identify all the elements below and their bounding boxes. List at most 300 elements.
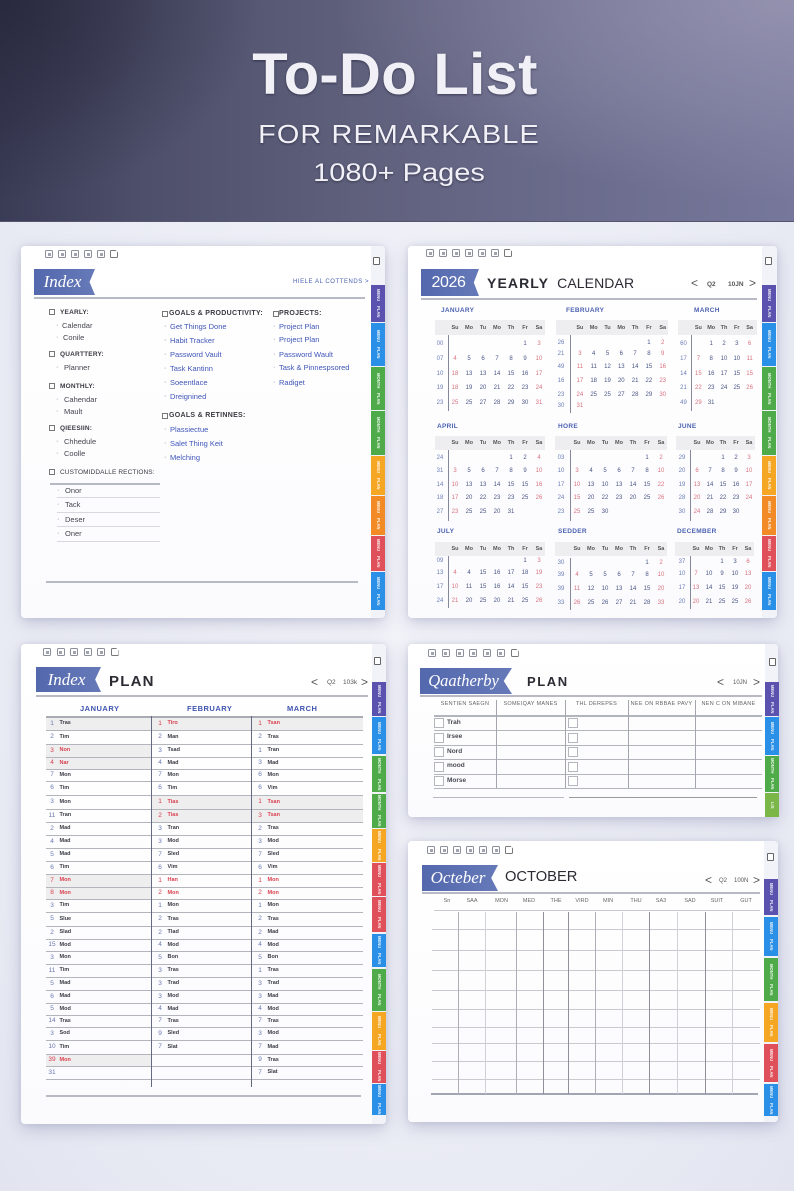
tab column background [765,644,778,817]
side tabs: PLAN [377,1070,382,1081]
index column: periods: Onor [65,486,82,495]
month: January: 6 [481,356,485,362]
month: January: 18 [452,371,458,377]
month: May: 4 [589,468,593,474]
month: December: 17 [679,585,685,591]
month: February: 30 [659,392,666,398]
side tabs: PLAN [377,917,382,929]
month: February: FEBRUARY [566,307,604,314]
month: June: 9 [734,468,738,474]
planner table: 11 [49,812,55,819]
month: May: 24 [558,495,564,501]
planner table: 31 [48,1069,56,1076]
planner table: 4 [158,941,162,948]
index column: goals: Plassiectue [170,425,208,434]
planner table: Mon [60,890,71,896]
month: September: 6 [617,572,621,578]
month: March: 15 [695,371,702,377]
side tabs: PLAN [769,900,774,911]
banner: October: Octeber [431,868,485,887]
planner table: Tras [268,734,279,740]
navigation: Q2 [327,679,336,686]
planner table: 2 [158,812,162,819]
side tabs: MENU [376,289,381,301]
toolbar icons [43,648,118,656]
month: April: 22 [480,495,486,501]
month: February: 25 [590,392,597,398]
planner table: 2 [50,929,54,936]
icon: page [769,658,776,666]
month: June: 24 [746,495,752,501]
month: January: 19 [437,385,443,391]
month: February: 28 [632,392,638,398]
planner table: 3 [158,980,162,987]
month: September: 20 [658,586,664,592]
month: February: 13 [618,364,625,370]
month: December: 3 [733,559,737,565]
index column: goals: · [164,426,166,433]
month: September: Su [573,546,581,552]
banner: Quarterly [420,668,512,694]
month: May: 6 [617,468,621,474]
month: February [556,307,668,413]
month: May: Mo [615,440,623,446]
planner table: Mon [268,890,279,896]
month: July: Su [451,546,459,552]
month: February: 17 [577,378,583,384]
month: February: Mo [590,325,598,331]
planner table: 3 [50,1030,54,1037]
planner table: Mon [168,772,179,778]
month headings: JANUARY [80,704,119,713]
month: February: Mo [617,325,625,331]
navigation: < [705,873,712,887]
side tabs: MENU [376,577,381,589]
side tabs: PLAN [769,1066,774,1077]
planner table: Tran [168,825,179,831]
month: March: 15 [746,371,753,377]
index column: goals: · [164,454,166,461]
index column: periods: · [56,364,58,371]
month: May: 17 [558,482,564,488]
month: January: Fr [522,325,528,331]
month: June: Mo [706,440,714,446]
side tabs: PLAN [377,739,382,750]
index column: periods: · [56,438,58,445]
planner table: 6 [50,864,54,871]
month: April: 25 [522,495,528,501]
index column: periods: Deser [65,515,85,524]
planner table: 5 [50,980,54,987]
month: January: 20 [480,385,486,391]
month: December: 9 [720,571,724,577]
index column: goals: GOALS & RETINNES: [169,412,246,419]
month: January: 4 [453,356,457,362]
planner table: 7 [258,1069,262,1076]
month: April: 9 [523,468,527,474]
planner table: Mon [60,954,71,960]
month: December: 10 [706,571,712,577]
side tabs: MENU [376,539,381,551]
side tabs: PLAN [376,437,381,449]
panel: index page [21,246,385,618]
month: March: 29 [695,400,702,406]
month: January: 30 [522,400,528,406]
month: May: 13 [616,482,622,488]
index column: projects: Task & Pinnespsored [279,363,349,372]
index column: projects: · [273,364,275,371]
month: April: 4 [537,455,541,461]
weekday headings: THU [630,898,642,904]
side tabs: PLAN [767,306,772,318]
side tabs: PLAN [376,518,381,530]
planner table: 14 [48,1017,56,1024]
month: February: 2 [661,340,664,346]
navigation: < [717,675,724,689]
index column: periods: Cahendar [64,395,97,404]
icon: page [374,657,381,665]
index column: periods: · [57,530,59,537]
month: February: 25 [604,392,611,398]
link: contents: HIELE AL COTTENDS > [293,279,369,285]
month: April: 14 [437,482,443,488]
index column: periods: QIEESIIN: [60,425,92,432]
index column: goals: GOALS & PRODUCTIVITY: [169,310,263,317]
side tabs: PLAN [377,815,382,827]
month: July: Tu [480,546,486,552]
month: April: 27 [437,509,443,515]
banner: Index: Index [44,272,81,291]
month: December: 10 [732,571,738,577]
index column: goals: Dreignined [170,392,206,401]
month: September [555,528,667,610]
header rule [422,892,760,894]
side tabs: PLAN [767,393,772,404]
month: May: 20 [588,495,594,501]
index column: projects: Project Plan [279,322,319,331]
planner table: 2 [158,733,162,740]
month: January: 15 [508,371,514,377]
month: December: 20 [745,585,751,591]
planner table: Tras [168,1018,179,1024]
month: September: 11 [574,586,580,592]
index column: periods: · [57,516,59,523]
side tabs: MENU [767,577,772,589]
month: May: 10 [602,482,608,488]
planner table: 4 [158,1005,162,1012]
month: April: 13 [466,482,472,488]
planner table: 2 [258,825,262,832]
index column: goals: Task Kantinn [170,364,213,373]
planner table [46,716,363,1087]
month: June: 10 [746,468,752,474]
planner table: Tsan [268,812,280,818]
month: July: 3 [537,558,541,564]
planner table: 2 [158,915,162,922]
month: February: 30 [558,403,564,409]
index column: periods: YEARLY: [60,309,89,316]
month: May: 23 [558,509,564,515]
planner table: Trad [168,980,179,986]
quarterly table: Trah [447,719,461,726]
month headings: MARCH [287,704,317,713]
planner table: Tras [268,916,279,922]
month: February: 21 [558,351,564,357]
month: March: 16 [708,371,715,377]
planner table: Tras [168,967,179,973]
planner table: 4 [258,1005,262,1012]
side tabs: MENU [767,461,772,473]
planner table: 7 [50,877,54,884]
month: September: 1 [645,560,649,566]
month: February: 27 [618,392,625,398]
month: June: 28 [707,509,713,515]
title: To-Do List [252,42,538,107]
weekday headings: GUT [740,898,752,904]
month: September: Tu [602,546,608,552]
month: June: 7 [708,468,712,474]
planner table: Vim [268,864,278,870]
planner table: 6 [258,784,262,791]
month: January: 7 [495,356,499,362]
planner table: Mon [268,772,279,778]
month: April: 13 [480,482,486,488]
planner table: 6 [158,864,162,871]
index column: periods: Mault [64,407,82,416]
side tabs: PLAN [377,1102,382,1114]
panel: yearly calendar page [408,246,777,618]
month: March: Sa [746,325,753,331]
side tabs: PLAN [376,556,381,568]
header banner [0,0,794,222]
month: April: 14 [494,482,500,488]
month: July: 24 [437,598,443,604]
month: December: 13 [693,585,699,591]
month: May: 10 [574,482,580,488]
planner table: 7 [258,1043,262,1050]
planner table: Mod [168,942,179,948]
month: January: 27 [480,400,486,406]
tab column background [764,841,778,1122]
side tabs: PLAN [770,739,775,750]
month: March [678,307,757,411]
month: January: Th [508,325,514,331]
header rule [421,298,757,300]
planner table: Tim [60,864,69,870]
month: July: Sa [536,546,542,552]
month: September: 28 [644,600,650,606]
month: May: 8 [645,468,649,474]
planner table: Tras [168,916,179,922]
planner table: Tim [60,734,69,740]
month: December: 13 [745,571,751,577]
planner table: Mon [60,1057,71,1063]
month: January: 13 [480,371,486,377]
side tabs: MENU [770,722,775,734]
month: September: 5 [603,572,607,578]
weekday headings: MED [523,898,535,904]
month grid [431,910,760,1095]
side tabs: MENU [769,1008,774,1020]
month: May: 30 [602,509,608,515]
index column: periods: · [56,334,58,341]
month: September: 2 [659,560,663,566]
month headings: FEBRUARY [187,704,232,713]
month: July: 20 [466,598,472,604]
planner table: 1 [158,720,162,727]
planner table: 3 [158,825,162,832]
month: January: 3 [537,341,541,347]
planner table: Mon [268,877,279,883]
navigation: > [753,675,760,689]
month: June: Th [720,440,726,446]
side tabs: PLAN [377,882,382,894]
month: April: 25 [480,509,486,515]
footer rule [46,581,358,582]
planner table: 1 [50,720,54,727]
month: September: 21 [630,600,636,606]
month: April: 25 [466,509,472,515]
index column: periods: MONTHLY: [60,383,95,390]
month: December: 15 [719,585,725,591]
index column: periods: Calendar [62,321,92,330]
month: March: Su [695,325,702,331]
planner table: Tiro [168,720,178,726]
month: February: 9 [661,351,664,357]
side tabs: PLAN [769,939,774,951]
side tabs [372,682,386,1115]
planner table: Mad [268,993,278,999]
month: June: 1 [721,455,725,461]
side tabs [765,682,779,817]
month: February: 26 [558,340,564,346]
index column: projects [273,310,349,387]
planner table: 4 [258,941,262,948]
month: January: Tu [480,325,486,331]
header rule [36,695,368,696]
planner table: Tsan [268,799,280,805]
month: January: 22 [508,385,514,391]
quarterly table: mood [447,762,465,769]
month: March: MARCH [694,307,720,314]
month: September: SEDDER [558,528,587,535]
month: April: 7 [495,468,499,474]
month: July: 16 [494,570,500,576]
side tabs: MENU [377,831,382,844]
month: December: 21 [706,599,712,605]
planner table: 4 [50,759,54,766]
month: March: 26 [746,385,753,391]
month: February: 23 [558,392,564,398]
side tabs: MENU [377,1085,382,1098]
planner table: Vim [168,864,178,870]
side tabs: PLAN [770,778,775,790]
month: December: 37 [679,559,685,565]
side tabs: MENU [377,1052,382,1065]
month: April: 16 [536,482,542,488]
month: July [435,528,545,608]
index column: projects: Radiget [279,378,305,387]
month: June: Fr [733,440,739,446]
index column: periods: Planner [64,363,90,372]
index column: goals: Password Vault [170,350,222,359]
index column: projects: Password Wault [279,350,333,359]
month: April: 26 [536,495,542,501]
planner table: 2 [258,733,262,740]
planner table: 7 [258,1017,262,1024]
month: April: 5 [467,468,471,474]
navigation: > [749,276,756,290]
month: June: 29 [679,455,685,461]
month: June: 17 [746,482,752,488]
month: February: Tu [604,325,611,331]
side tabs: MENU [767,330,772,342]
side tabs: PLAN [767,518,772,530]
month: February: Th [632,325,638,331]
month: July: 13 [437,570,443,576]
month: December: 1 [720,559,724,565]
month: June: 3 [747,455,751,461]
planner table: Tim [60,902,69,908]
navigation: 100N [734,878,748,884]
index column: periods: Conile [63,333,84,342]
month: February: 31 [577,403,583,409]
side tabs: MENU [377,1016,382,1029]
month: April: Tu [480,440,486,446]
month: February: 7 [633,351,637,357]
quarterly table: THL DEREPES [576,701,617,707]
planner table: 6 [50,993,54,1000]
month: January: 13 [466,371,472,377]
index column: periods: · [56,450,58,457]
side tabs: MENU [769,883,774,895]
month: February: 1 [647,340,651,346]
planner table: Mon [268,902,279,908]
month: January: 8 [509,356,513,362]
month: December: 6 [746,559,750,565]
index column: goals: · [164,365,166,372]
header rule [34,297,365,298]
planner table: Tran [60,812,71,818]
month: March: 1 [710,341,713,347]
planner table: Tsan [268,720,280,726]
month: March: Mo [707,325,715,331]
month: March: 24 [721,385,727,391]
planner table: Tran [268,747,279,753]
navigation [311,675,368,689]
navigation [717,675,760,689]
month: April: 15 [522,482,528,488]
month: June: 13 [694,482,700,488]
month: May: 25 [588,509,594,515]
side tabs: MENU [376,330,381,342]
planner table: Slat [268,1069,278,1075]
toolbar icons [428,649,519,657]
weekday headings: SAA [466,898,478,904]
side tabs: PLAN [377,953,382,965]
weekday headings: VIRD [575,898,589,904]
month: March: 3 [735,341,738,347]
side tabs: PLAN [767,478,772,490]
month: May: 10 [558,468,564,474]
month: March: 14 [680,371,687,377]
month: May: 10 [658,468,664,474]
month: June: 2 [734,455,738,461]
month: June: JUNE [678,423,697,430]
navigation: < [691,276,698,290]
planner table: Tim [168,785,177,791]
side tabs: MENU [376,501,381,513]
